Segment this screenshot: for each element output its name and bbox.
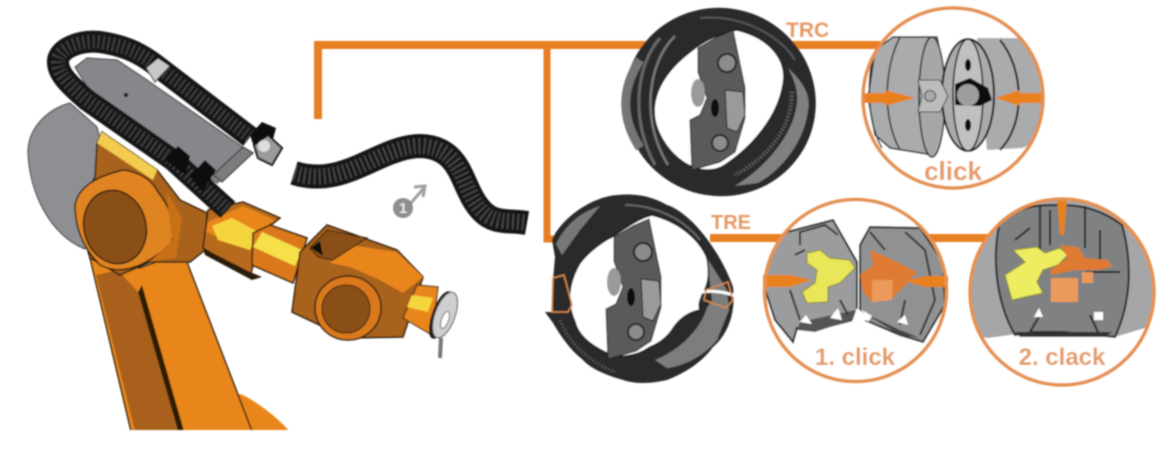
- click detail circle: [862, 7, 1045, 189]
- orange latch: [860, 250, 917, 302]
- TRC centre piece: [690, 30, 745, 170]
- yellow latch: [1005, 247, 1068, 300]
- arm shadow: [150, 190, 182, 262]
- robot arm: [28, 103, 463, 432]
- TRC label: TRC: [786, 19, 829, 42]
- TRE ring: [545, 195, 736, 383]
- upper housing: [76, 132, 207, 275]
- 1. click label: 1. click: [815, 344, 896, 371]
- grey rear disc: [28, 103, 110, 249]
- inward arrows: [763, 275, 812, 287]
- wrist cap: [315, 276, 381, 340]
- lower arm: [90, 252, 252, 431]
- opening: [654, 30, 784, 170]
- 2. clack label: 2. clack: [1019, 344, 1106, 371]
- orange latch: [1050, 245, 1112, 275]
- lower base: [238, 392, 289, 432]
- TRC ring: [598, 0, 842, 223]
- mounted hose: [58, 42, 250, 210]
- wrist tip: [403, 285, 438, 335]
- joint cap: [82, 188, 148, 266]
- icon: numbered arrow 1: 1: [399, 200, 407, 217]
- shoulder joint: [75, 170, 174, 270]
- 1. click detail circle: [762, 198, 948, 382]
- TRE ring gaps: [702, 291, 736, 296]
- opening: [570, 215, 708, 356]
- forearm sleeve: [203, 202, 280, 277]
- flange: [428, 290, 450, 340]
- mounted hose plate: [75, 58, 253, 183]
- downward arrow: [1057, 199, 1067, 235]
- icon: numbered arrow 1: [393, 186, 425, 218]
- inward arrows: [862, 90, 915, 106]
- yellow latch: [802, 250, 855, 303]
- detached hose: [294, 146, 527, 223]
- TRE label: TRE: [711, 212, 751, 234]
- forearm tube: [252, 225, 307, 283]
- connector lines: [318, 45, 1000, 239]
- hose clamps: [146, 58, 170, 82]
- wrist block: [292, 225, 423, 338]
- click label: click: [924, 156, 982, 186]
- TRE centre piece: [606, 219, 661, 359]
- 2. clack detail circle: [965, 198, 1160, 386]
